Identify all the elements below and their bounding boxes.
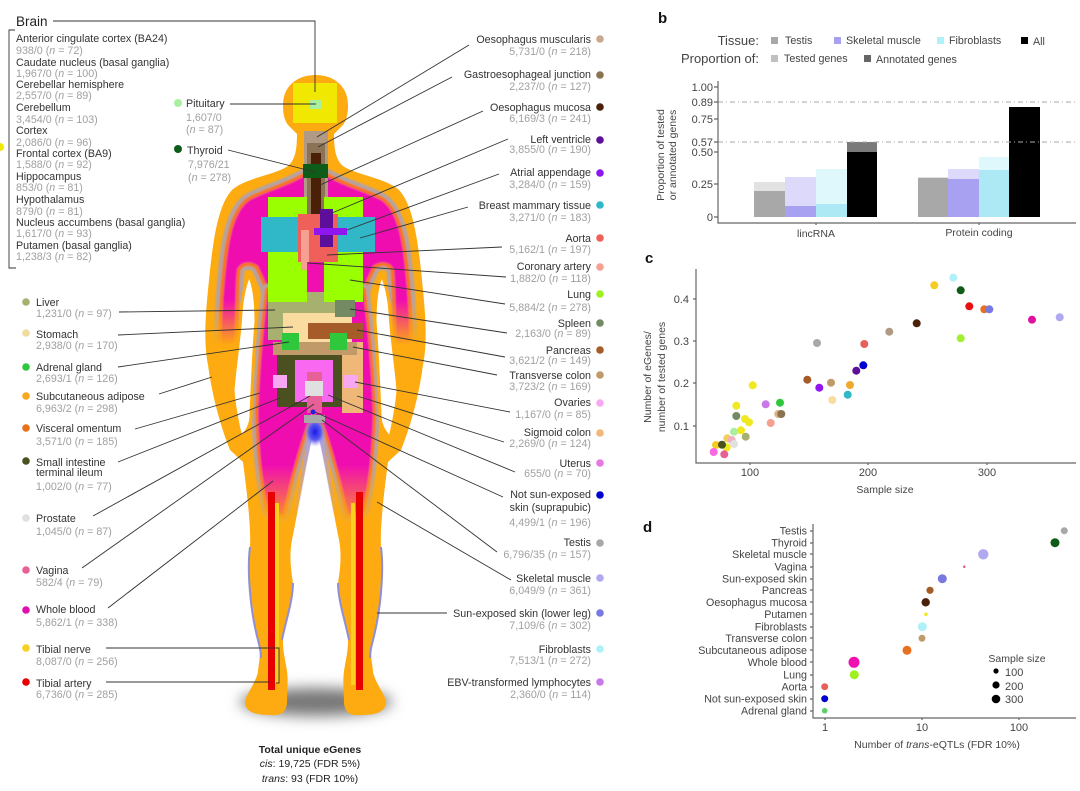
- bars: [754, 107, 1040, 217]
- tick labels c: 300: [978, 467, 996, 479]
- y axis title b: [655, 109, 679, 201]
- right tissue labels: Not sun-exposed: [510, 489, 591, 501]
- brain tissue list: Cerebellum: [16, 102, 71, 114]
- scatter points: [710, 274, 1064, 458]
- legend b: Annotated genes: [876, 54, 957, 66]
- panel c: scatter plot: Number of eGenes/: [642, 331, 654, 423]
- brain tissue list: 2,086/0 (n = 96): [16, 137, 92, 149]
- vagina: [307, 372, 322, 413]
- left tissue labels: Visceral omentum: [36, 423, 121, 435]
- floor shadow: [240, 688, 392, 716]
- tissue axis labels: Skeletal muscle: [732, 549, 807, 561]
- brain tissue list: Hippocampus: [16, 171, 81, 183]
- tick labels c: 0.1: [674, 421, 689, 433]
- panel d: dot plot: [643, 519, 1076, 751]
- left tissue labels: 582/4 (n = 79): [36, 577, 103, 589]
- right tissue labels: Sigmoid colon: [524, 427, 591, 439]
- panel label b: b: [658, 10, 667, 27]
- right tissue labels: 1,167/0 (n = 85): [515, 409, 591, 421]
- sample size legend: Sample size: [988, 653, 1046, 665]
- label: Thyroid: 7,976/21: [188, 159, 230, 171]
- sample size legend: 300: [1005, 694, 1023, 706]
- not sun-exposed skin dot: [310, 410, 316, 414]
- pancreas: [308, 323, 363, 339]
- left tissue labels: Prostate: [36, 513, 76, 525]
- tick labels c: 0.4: [674, 294, 689, 306]
- left tissue labels: Adrenal gland: [36, 362, 102, 374]
- tick labels c: 0.2: [674, 378, 689, 390]
- tibial artery: [268, 492, 363, 690]
- ovaries: [273, 375, 358, 388]
- legend b: Tissue:: [718, 33, 759, 48]
- right tissue labels: 2,269/0 (n = 124): [509, 438, 591, 450]
- human body figure: [205, 75, 426, 716]
- sigmoid colon: [342, 342, 363, 413]
- left tissue labels: 3,571/0 (n = 185): [36, 436, 118, 448]
- legend b: Skeletal muscle: [846, 35, 921, 47]
- legend b: Proportion of:: [681, 51, 759, 66]
- right tissue labels: Gastroesophageal junction: [464, 69, 591, 81]
- label: Pituitary: Pituitary: [186, 98, 225, 110]
- right tissue labels: 5,731/0 (n = 218): [509, 46, 591, 58]
- brain tissue list: Hypothalamus: [16, 194, 84, 206]
- y tick labels b: [692, 82, 713, 224]
- y tick labels b: 0.89: [692, 97, 713, 109]
- label: Thyroid: [174, 145, 231, 184]
- left tissue labels: Small intestine: [36, 457, 106, 469]
- panel b: bar chart: [655, 10, 1076, 240]
- panel b: bar chart: Protein coding: [945, 227, 1013, 239]
- tissue axis labels: Putamen: [764, 609, 807, 621]
- label: Pituitary: [174, 98, 225, 136]
- brain tissue list: Cortex: [16, 125, 48, 137]
- legend b: Tested genes: [784, 53, 848, 65]
- tissue axis labels: Oesophagus mucosa: [706, 597, 807, 609]
- right tissue labels: Left ventricle: [530, 134, 591, 146]
- right tissue labels: Pancreas: [546, 345, 591, 357]
- total unique eGenes: [259, 744, 361, 785]
- total unique eGenes: trans: 93 (FDR 10%): [262, 773, 358, 785]
- y tick labels b: 0.25: [692, 179, 713, 191]
- atrial appendage: [314, 228, 347, 235]
- tissue axis labels: Sun-exposed skin: [722, 574, 807, 586]
- right tissue labels: Testis: [564, 537, 591, 549]
- x axis title d: Number of trans-eQTLs (FDR 10%): [854, 739, 1020, 751]
- gastroesophageal junction: [307, 143, 325, 216]
- tibial nerve: [275, 503, 355, 685]
- left tissue labels: Stomach: [36, 329, 78, 341]
- y tick labels b: 0.57: [692, 137, 713, 149]
- tissue axis labels: [698, 526, 807, 718]
- coronary artery: [301, 230, 309, 270]
- testis: [304, 415, 325, 423]
- right tissue labels: Ovaries: [554, 397, 591, 409]
- axes c: [696, 269, 1076, 463]
- brain tissue list: 3,454/0 (n = 103): [16, 114, 98, 126]
- brain tissue list: 1,588/0 (n = 92): [16, 159, 92, 171]
- brain tissue list: 1,967/0 (n = 100): [16, 68, 98, 80]
- right tissue labels: 3,723/2 (n = 169): [509, 381, 591, 393]
- tissue axis labels: Subcutaneous adipose: [698, 645, 807, 657]
- not sun-exposed skin at groin: [304, 417, 326, 447]
- right tissue labels: 3,271/0 (n = 183): [509, 212, 591, 224]
- right tissue labels: Sun-exposed skin (lower leg): [453, 608, 591, 620]
- left tissue labels: Tibial nerve: [36, 644, 91, 656]
- right tissue labels: Lung: [567, 289, 591, 301]
- tissue axis labels: Not sun-exposed skin: [704, 694, 807, 706]
- tick labels c: 200: [859, 467, 877, 479]
- label: Thyroid: Thyroid: [187, 145, 223, 157]
- right tissue labels: 2,237/0 (n = 127): [509, 81, 591, 93]
- heading: Brain: Brain: [16, 14, 48, 29]
- oesophagus mucosa: [311, 153, 321, 215]
- brain tissue list: Anterior cingulate cortex (BA24): [16, 33, 167, 45]
- left tissue labels: terminal ileum: [36, 467, 103, 479]
- legend b: [681, 33, 1045, 66]
- prostate: [305, 381, 323, 396]
- left tissue labels: Whole blood: [36, 604, 95, 616]
- brain tissue list: Nucleus accumbens (basal ganglia): [16, 217, 185, 229]
- left tissue labels: 2,938/0 (n = 170): [36, 340, 118, 352]
- tissue axis labels: Testis: [780, 526, 807, 538]
- legend b: Testis: [785, 35, 812, 47]
- x tick labels b: lincRNA: [797, 228, 835, 240]
- brain: [293, 83, 337, 123]
- y axis title b: Proportion of tested: [655, 109, 667, 201]
- sample size legend: 100: [1005, 667, 1023, 679]
- tissue axis labels: Lung: [783, 670, 807, 682]
- left ventricle: [320, 209, 333, 247]
- right tissue labels: 3,621/2 (n = 149): [509, 355, 591, 367]
- brain tissue list: 2,557/0 (n = 89): [16, 90, 92, 102]
- brain tissue list: 1,617/0 (n = 93): [16, 228, 92, 240]
- label: Thyroid: (n = 278): [188, 172, 231, 184]
- right tissue labels: Breast mammary tissue: [479, 200, 591, 212]
- right tissue labels: Skeletal muscle: [516, 573, 591, 585]
- tissue axis labels: Aorta: [781, 682, 807, 694]
- left tissue labels: 6,963/2 (n = 298): [36, 403, 118, 415]
- x tick labels d: [822, 722, 1028, 734]
- aorta: [298, 214, 338, 262]
- right tissue labels: Fibroblasts: [539, 644, 591, 656]
- brain tissue list: 938/0 (n = 72): [16, 45, 83, 57]
- left tissue labels: Tibial artery: [36, 678, 92, 690]
- axes d: [813, 524, 1076, 718]
- tissue axis labels: Fibroblasts: [755, 622, 807, 634]
- right tissue labels: 6,169/3 (n = 241): [509, 113, 591, 125]
- left tissue labels: Subcutaneous adipose: [36, 391, 145, 403]
- sun-exposed skin on calf: [249, 547, 293, 658]
- brain tissue list: 879/0 (n = 81): [16, 206, 83, 218]
- transverse colon: [273, 342, 357, 355]
- tissue axis labels: Transverse colon: [725, 633, 807, 645]
- right tissue labels: 5,162/1 (n = 197): [509, 244, 591, 256]
- right tissue labels: 4,499/1 (n = 196): [509, 517, 591, 529]
- axes b: [718, 81, 1076, 223]
- whole blood centre: [307, 262, 324, 292]
- legend b: All: [1033, 36, 1045, 48]
- left tissue labels: 8,087/0 (n = 256): [36, 656, 118, 668]
- x tick labels d: 10: [916, 722, 928, 734]
- brain tissue list: Caudate nucleus (basal ganglia): [16, 57, 169, 69]
- right tissue labels: Oesophagus muscularis: [476, 34, 591, 46]
- right tissue labels: Atrial appendage: [510, 167, 591, 179]
- torso and thigh tissue layers: [258, 290, 316, 515]
- y tick labels b: 0: [707, 212, 713, 224]
- right tissue labels: 2,163/0 (n = 89): [515, 328, 591, 340]
- total unique eGenes: Total unique eGenes: [259, 744, 361, 756]
- right tissue labels: Oesophagus mucosa: [490, 102, 591, 114]
- x tick labels d: 1: [822, 722, 828, 734]
- brain tissue list: [16, 33, 185, 263]
- panel label c: c: [645, 250, 653, 267]
- tissue axis labels: Adrenal gland: [741, 706, 807, 718]
- right tissue labels: 7,109/6 (n = 302): [509, 620, 591, 632]
- brain tissue list: Putamen (basal ganglia): [16, 240, 132, 252]
- left tissue labels: 1,231/0 (n = 97): [36, 308, 112, 320]
- right tissue labels: Uterus: [560, 458, 591, 470]
- right tissue labels: Coronary artery: [517, 261, 592, 273]
- liver: [268, 292, 352, 340]
- adrenal glands: [282, 333, 347, 350]
- axis titles c: Sample size: [856, 484, 914, 496]
- body half: left: [205, 75, 316, 715]
- tissue axis labels: Whole blood: [748, 657, 807, 669]
- left tissue labels: 1,002/0 (n = 77): [36, 481, 112, 493]
- small intestine: [277, 355, 342, 407]
- brain tissue list: Frontal cortex (BA9): [16, 148, 112, 160]
- brain tissue list: Cerebellar hemisphere: [16, 79, 124, 91]
- right tissue labels: 3,284/0 (n = 159): [509, 179, 591, 191]
- right tissue labels: Transverse colon: [509, 370, 591, 382]
- right tissue labels: 6,049/9 (n = 361): [509, 585, 591, 597]
- y tick labels b: 0.75: [692, 114, 713, 126]
- arm and shoulder tissue layers: [221, 172, 316, 345]
- breast mammary tissue: [261, 217, 375, 252]
- tick labels c: 0.3: [674, 336, 689, 348]
- brain colour dot: [0, 143, 4, 151]
- sample size legend: [988, 653, 1046, 706]
- reference lines: [718, 102, 1076, 142]
- y tick labels b: 1.00: [692, 82, 713, 94]
- right tissue labels: 1,882/0 (n = 118): [510, 273, 591, 285]
- tissue axis labels: Thyroid: [771, 538, 807, 550]
- lungs: [268, 197, 363, 302]
- tissue axis labels: Pancreas: [762, 585, 807, 597]
- oesophagus muscularis: [304, 131, 328, 216]
- left tissue labels: 5,862/1 (n = 338): [36, 617, 118, 629]
- inner thigh skin: [295, 434, 311, 520]
- tick labels c: 100: [741, 467, 759, 479]
- pituitary: [310, 100, 322, 109]
- right tissue labels: Aorta: [565, 233, 591, 245]
- brain tissue list: 1,238/3 (n = 82): [16, 251, 92, 263]
- right tissue labels: EBV-transformed lymphocytes: [447, 677, 591, 689]
- y axis title b: or annotated genes: [667, 110, 679, 200]
- right tissue labels: Spleen: [558, 318, 591, 330]
- left tissue labels: 1,045/0 (n = 87): [36, 526, 112, 538]
- right tissue labels: 655/0 (n = 70): [524, 468, 591, 480]
- points d: [821, 527, 1068, 714]
- stomach: [283, 313, 352, 343]
- left tissue labels: Liver: [36, 297, 60, 309]
- gap between arm and torso: [233, 275, 256, 438]
- thyroid: [303, 164, 328, 178]
- left tissue labels: Vagina: [36, 565, 69, 577]
- leader lines: [9, 21, 515, 683]
- brain tissue list: 853/0 (n = 81): [16, 182, 83, 194]
- left tissue labels: 2,693/1 (n = 126): [36, 373, 118, 385]
- x tick labels d: 100: [1010, 722, 1028, 734]
- left tissue labels: 6,736/0 (n = 285): [36, 689, 118, 701]
- sample size legend: 200: [1005, 681, 1023, 693]
- spleen: [335, 300, 355, 317]
- right tissue labels: 7,513/1 (n = 272): [509, 655, 591, 667]
- panel c: scatter plot: [642, 250, 1076, 496]
- y tick labels b: 0.50: [692, 147, 713, 159]
- uterus: [295, 360, 333, 402]
- tissue axis labels: Vagina: [775, 562, 807, 574]
- panel label d: d: [643, 519, 652, 536]
- right tissue labels: skin (suprapubic): [510, 502, 591, 514]
- left tissue labels: [22, 297, 145, 701]
- right tissue labels: [447, 34, 604, 701]
- right tissue labels: 2,360/0 (n = 114): [510, 689, 591, 701]
- right tissue labels: 6,796/35 (n = 157): [503, 549, 591, 561]
- right tissue labels: 5,884/2 (n = 278): [509, 302, 591, 314]
- label: Pituitary: 1,607/0: [186, 112, 222, 124]
- legend b: Fibroblasts: [949, 35, 1001, 47]
- tick labels c: [674, 294, 996, 479]
- panel c: scatter plot: number of tested genes: [656, 322, 668, 432]
- right tissue labels: 3,855/0 (n = 190): [509, 144, 591, 156]
- total unique eGenes: cis: 19,725 (FDR 5%): [260, 758, 360, 770]
- label: Pituitary: (n = 87): [186, 124, 223, 136]
